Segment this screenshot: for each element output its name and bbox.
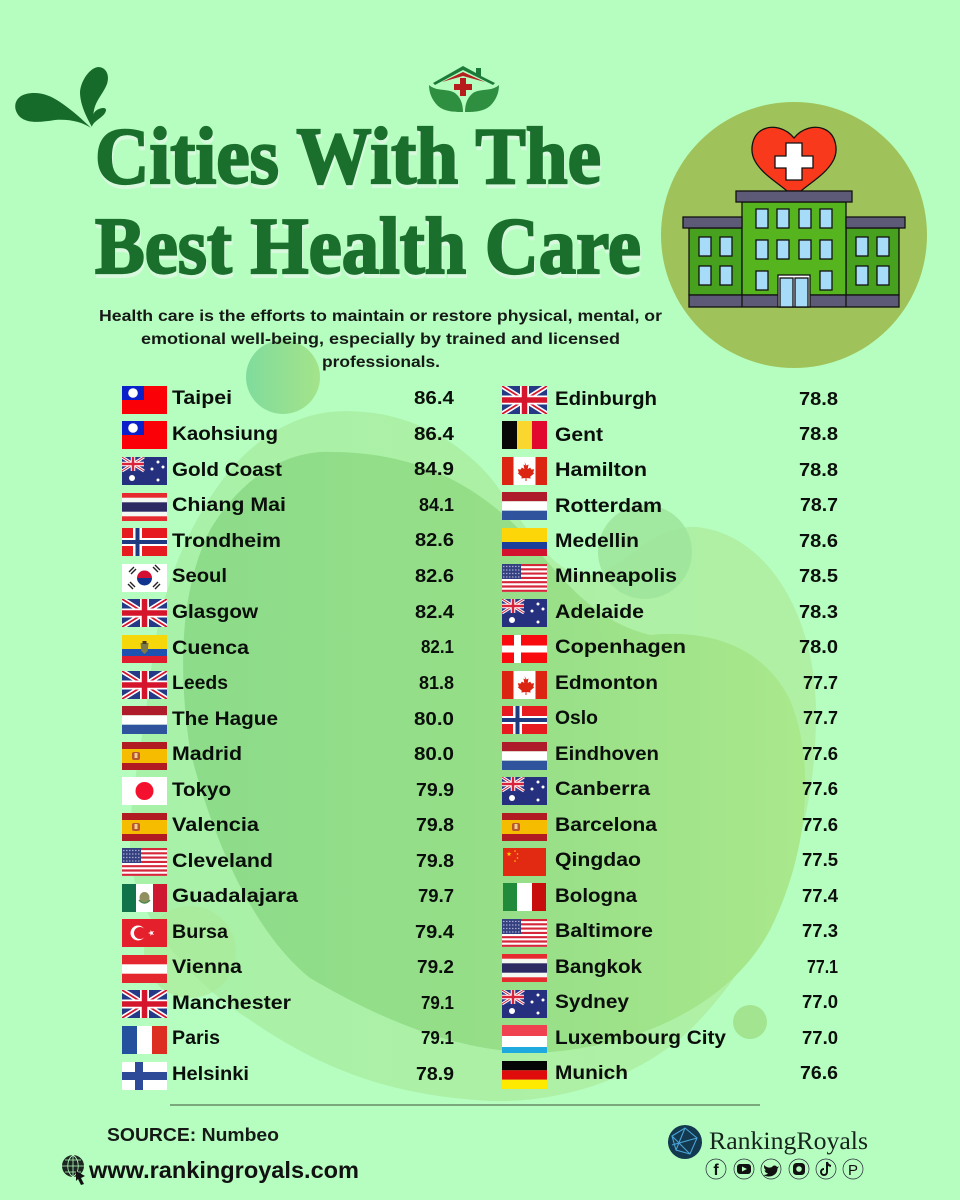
row: Oslo <box>502 706 838 734</box>
row: Barcelona: Barcelona <box>555 815 657 836</box>
row: The Hague: 80.0 <box>414 709 454 729</box>
row: Luxembourg City: Luxembourg City <box>555 1028 726 1049</box>
row: Baltimore <box>502 919 838 947</box>
row: Bangkok: 77.1 <box>807 957 838 977</box>
row: Copenhagen <box>502 635 838 663</box>
row: Bologna: 77.4 <box>802 886 838 906</box>
row: Munich: Munich <box>555 1063 628 1084</box>
row: Canberra: 77.6 <box>802 779 838 799</box>
title: Cities With The <box>95 113 601 201</box>
row: Munich <box>502 1061 838 1089</box>
row: Gold Coast <box>122 457 454 485</box>
row: Edmonton: Edmonton <box>555 673 658 694</box>
row: Qingdao: 77.5 <box>802 850 838 870</box>
row: Seoul: 82.6 <box>415 566 454 586</box>
row: Minneapolis: 78.5 <box>799 566 838 586</box>
row: Kaohsiung: 86.4 <box>414 424 454 444</box>
row: Canberra: Canberra <box>555 779 650 800</box>
row: Manchester: Manchester <box>172 993 292 1014</box>
row: Glasgow: Glasgow <box>172 602 258 623</box>
row: Seoul: Seoul <box>172 566 227 587</box>
row: Qingdao: Qingdao <box>555 850 641 871</box>
row: Guadalajara: 79.7 <box>418 886 454 906</box>
row: Bologna: Bologna <box>555 886 637 907</box>
heart <box>752 127 836 191</box>
row: Manchester <box>122 990 454 1018</box>
row: Valencia: 79.8 <box>416 815 454 835</box>
row: Medellin: Medellin <box>555 531 639 552</box>
row: Madrid <box>122 742 454 770</box>
row: Adelaide: Adelaide <box>555 602 644 623</box>
row: Oslo: Oslo <box>555 708 598 729</box>
social icons <box>706 1159 863 1179</box>
row: Edinburgh <box>502 386 838 414</box>
row: Leeds <box>122 671 454 699</box>
row: Tokyo: Tokyo <box>172 780 231 801</box>
icon: green splash <box>15 67 108 128</box>
row: Gent: 78.8 <box>799 424 838 444</box>
row: Guadalajara: Guadalajara <box>172 886 298 907</box>
row: Taipei <box>122 386 454 414</box>
row: Copenhagen: Copenhagen <box>555 637 686 658</box>
row: Bursa <box>122 919 454 947</box>
row: Valencia: Valencia <box>172 815 259 836</box>
illustration: hospital in circle <box>661 102 927 368</box>
row: Medellin <box>502 528 838 556</box>
row: Bangkok <box>502 954 838 982</box>
row: Kaohsiung <box>122 421 454 449</box>
row: Madrid: 80.0 <box>414 744 454 764</box>
row: Valencia <box>122 813 454 841</box>
row: Helsinki: 78.9 <box>416 1064 454 1084</box>
row: Eindhoven: Eindhoven <box>555 744 659 765</box>
row: Guadalajara <box>122 884 454 912</box>
row: The Hague <box>122 706 454 734</box>
row: Vienna <box>122 955 454 983</box>
row: Barcelona: 77.6 <box>802 815 838 835</box>
row: Baltimore: Baltimore <box>555 921 653 942</box>
row: Kaohsiung: Kaohsiung <box>172 424 278 445</box>
row: Edinburgh: 78.8 <box>799 389 838 409</box>
row: Gent <box>502 421 838 449</box>
row: Sydney: 77.0 <box>802 992 838 1012</box>
row: Leeds: 81.8 <box>419 673 454 693</box>
row: Bangkok: Bangkok <box>555 957 642 978</box>
website: www.rankingroyals.com <box>88 1157 359 1183</box>
row: Paris: 79.1 <box>421 1028 454 1048</box>
row: Rotterdam <box>502 492 838 520</box>
row: Copenhagen: 78.0 <box>799 637 838 657</box>
social icons: f <box>713 1162 719 1179</box>
row: Bursa: 79.4 <box>415 922 454 942</box>
row: Cleveland: 79.8 <box>416 851 454 871</box>
row: Bologna <box>503 883 838 911</box>
social icons: P <box>848 1162 858 1179</box>
row: Baltimore: 77.3 <box>802 921 838 941</box>
row: Adelaide <box>502 599 838 627</box>
description text: Health care is the efforts to maintain or restore physical, mental, or <box>99 308 662 325</box>
row: Eindhoven: 77.6 <box>802 744 838 764</box>
row: Rotterdam: Rotterdam <box>555 496 662 517</box>
right column ranking <box>502 386 838 1089</box>
row: Glasgow: 82.4 <box>415 602 454 622</box>
row: Edmonton <box>502 671 838 699</box>
row: Chiang Mai: Chiang Mai <box>172 495 286 516</box>
row: Canberra <box>502 777 838 805</box>
icon: globe with cursor <box>62 1155 85 1185</box>
row: Qingdao <box>503 848 838 876</box>
row: Helsinki: Helsinki <box>172 1064 249 1085</box>
description text: emotional well-being, especially by trained and licensed <box>141 331 620 348</box>
source: SOURCE: Numbeo <box>107 1125 279 1145</box>
row: Medellin: 78.6 <box>799 531 838 551</box>
row: Bursa: Bursa <box>172 922 228 943</box>
row: Gold Coast: 84.9 <box>414 459 454 479</box>
row: Trondheim: Trondheim <box>172 531 281 552</box>
row: Edinburgh: Edinburgh <box>555 389 657 410</box>
row: Minneapolis <box>502 564 838 592</box>
row: Cuenca <box>122 635 454 663</box>
row: Sydney <box>502 990 838 1018</box>
row: Gold Coast: Gold Coast <box>172 460 283 481</box>
row: Tokyo <box>122 777 454 805</box>
row: Helsinki <box>122 1062 454 1090</box>
icon: RankingRoyals logo <box>668 1125 702 1159</box>
row: The Hague: The Hague <box>172 709 278 730</box>
row: Vienna: 79.2 <box>417 957 454 977</box>
row: Oslo: 77.7 <box>803 708 838 728</box>
icon: health care logo <box>429 66 499 112</box>
row: Barcelona <box>502 813 838 841</box>
row: Chiang Mai <box>122 493 454 521</box>
row: Adelaide: 78.3 <box>799 602 838 622</box>
row: Madrid: Madrid <box>172 744 242 765</box>
description text: professionals. <box>322 354 440 371</box>
description text <box>99 308 662 371</box>
row: Taipei: Taipei <box>172 388 232 409</box>
left column ranking <box>122 386 454 1090</box>
row: Paris: Paris <box>172 1028 220 1049</box>
background blobs <box>130 340 816 1101</box>
row: Luxembourg City <box>502 1025 838 1053</box>
row: Rotterdam: 78.7 <box>800 495 838 515</box>
row: Hamilton: 78.8 <box>799 460 838 480</box>
row: Vienna: Vienna <box>172 957 242 978</box>
row: Leeds: Leeds <box>172 673 228 694</box>
row: Trondheim: 82.6 <box>415 530 454 550</box>
row: Hamilton: Hamilton <box>555 460 647 481</box>
title: Best Health Care <box>95 203 641 291</box>
row: Taipei: 86.4 <box>414 388 454 408</box>
row: Munich: 76.6 <box>800 1063 838 1083</box>
cross <box>775 143 813 180</box>
row: Tokyo: 79.9 <box>416 780 454 800</box>
row: Manchester: 79.1 <box>421 993 454 1013</box>
row: Paris <box>122 1026 454 1054</box>
row: Minneapolis: Minneapolis <box>555 566 677 587</box>
row: Cleveland: Cleveland <box>172 851 273 872</box>
row: Gent: Gent <box>555 425 604 446</box>
row: Cuenca: 82.1 <box>421 637 454 657</box>
row: Glasgow <box>122 599 454 627</box>
row: Hamilton <box>502 457 838 485</box>
row: Luxembourg City: 77.0 <box>802 1028 838 1048</box>
row: Cuenca: Cuenca <box>172 638 249 659</box>
row: Eindhoven <box>502 742 838 770</box>
row: Trondheim <box>122 528 454 556</box>
row: Sydney: Sydney <box>555 992 629 1013</box>
title <box>95 113 641 291</box>
row: Edmonton: 77.7 <box>803 673 838 693</box>
row: Seoul <box>122 564 454 592</box>
row: Cleveland <box>122 848 454 876</box>
row: Chiang Mai: 84.1 <box>419 495 454 515</box>
brand name: RankingRoyals <box>709 1128 868 1155</box>
